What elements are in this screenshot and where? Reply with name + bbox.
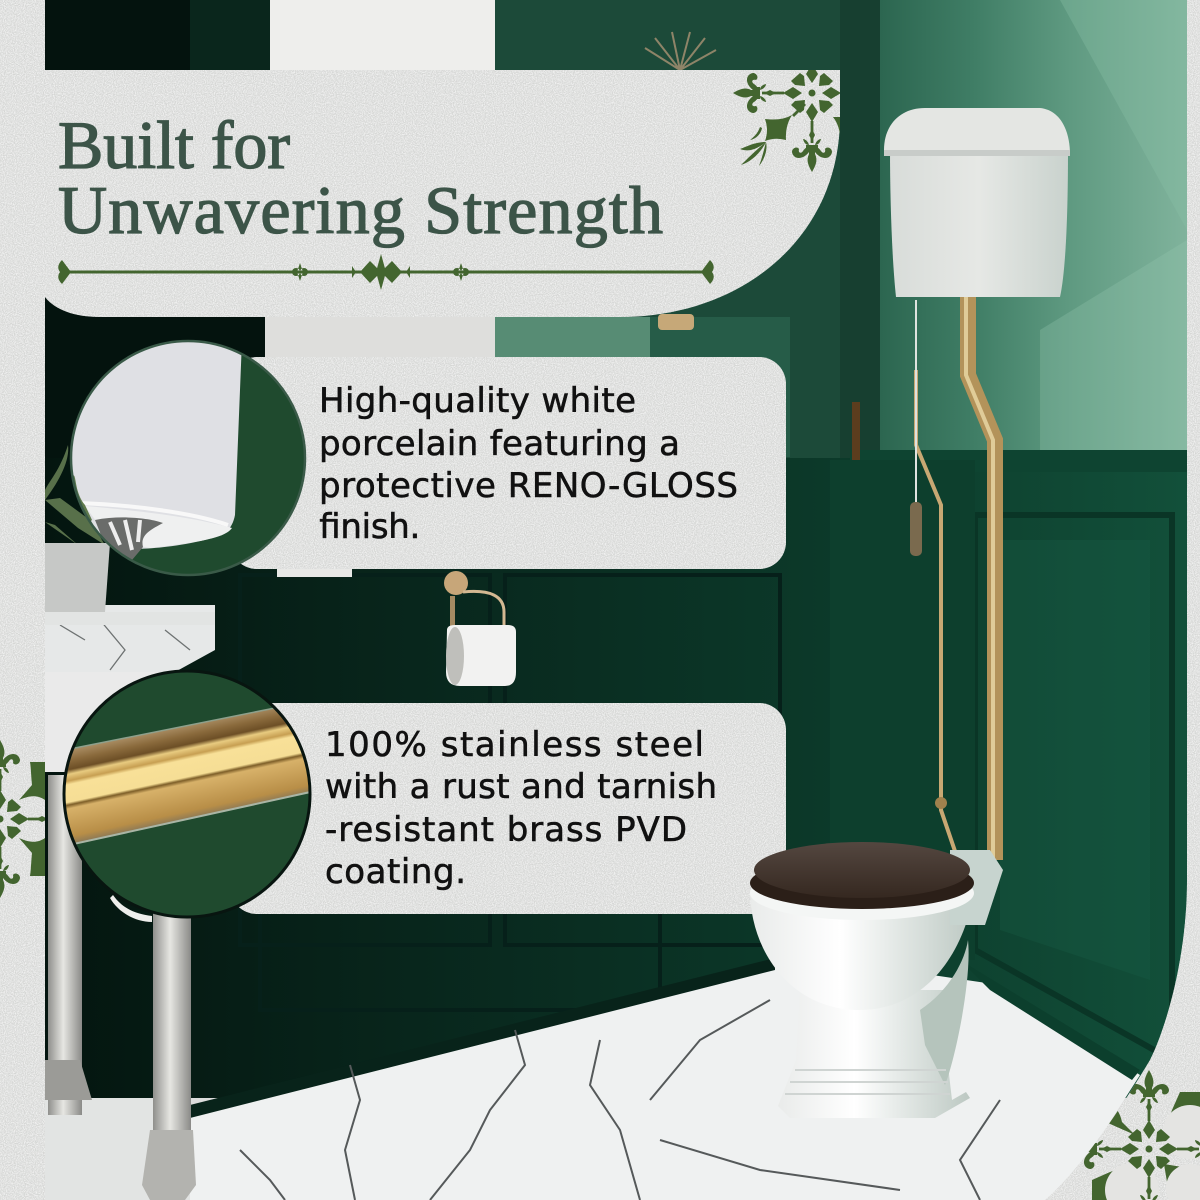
plant: [45, 445, 105, 545]
marble top: [45, 605, 215, 672]
marble floor: [45, 958, 1140, 1200]
pedestal: [778, 940, 970, 1118]
rear mount: [950, 850, 1003, 925]
pull chain and handle: [910, 300, 922, 556]
card 2 text: -resistant brass PVD: [325, 810, 687, 850]
bowl: [750, 885, 975, 1010]
paper edge below card 1: [277, 565, 352, 577]
card 1 text: protective RENO-GLOSS: [319, 466, 738, 506]
circle: brass rod close-up: [60, 670, 315, 920]
card 1 text: [319, 381, 738, 547]
ornament: left edge: [0, 740, 45, 898]
vanity with marble top, legs and plant: [45, 445, 215, 1200]
card 2 text: with a rust and tarnish: [325, 767, 717, 807]
title: Built for: [58, 107, 290, 183]
legs: [45, 775, 196, 1200]
card 2 text: 100% stainless steel: [325, 725, 704, 765]
ornamental divider: [58, 254, 714, 290]
panel: porcelain detail: [70, 340, 738, 585]
ornament: bottom right corner: [1084, 1070, 1200, 1200]
wall brass hardware: [658, 314, 860, 460]
card 1 text: finish.: [319, 507, 420, 547]
plant pot: [45, 543, 215, 625]
fan ornament on wall: [645, 32, 716, 70]
circle: porcelain close-up: [70, 340, 310, 585]
cistern: [884, 108, 1070, 297]
title: [58, 107, 663, 248]
card 2 text: coating.: [325, 852, 466, 892]
lower wainscot wall: [45, 450, 1187, 1098]
ornament: header corner: [733, 70, 840, 172]
panel: brass detail: [60, 670, 717, 920]
upper wall: [45, 0, 1187, 470]
circle ring: [64, 671, 310, 917]
card 2 text: [325, 725, 717, 892]
brass flush pipes: [916, 290, 995, 860]
toilet paper holder: [444, 571, 516, 686]
title: Unwavering Strength: [58, 172, 663, 248]
sink basin: [45, 672, 205, 772]
card 1 text: High-quality white: [319, 381, 636, 421]
card 1 text: porcelain featuring a: [319, 424, 680, 464]
high tank toilet: [750, 108, 1070, 1118]
circle ring: [71, 341, 305, 575]
wooden seat: [750, 842, 974, 920]
